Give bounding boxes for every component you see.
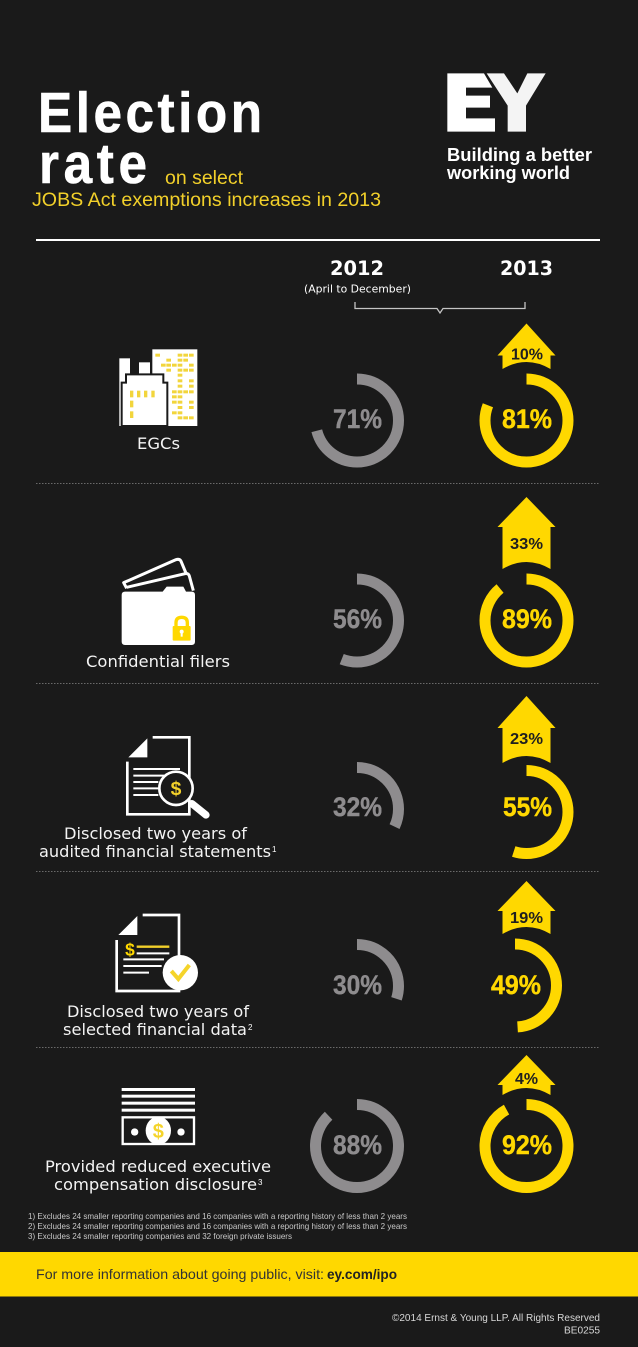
ring: Confidential 2013: 89% — [502, 604, 552, 634]
label: executive compensation disclosure: 3 — [258, 1178, 263, 1187]
label: selected financial data: 2 — [248, 1023, 253, 1032]
ring: selected 2013 — [474, 944, 556, 1027]
footnotes: 1) Excludes 24 smaller reporting companies and 16 companies with a reporting history of less than 2 years — [28, 1211, 407, 1221]
call to action band: For more information about going public, visit: — [36, 1266, 324, 1282]
label: Confidential filers: Confidential filers — [86, 652, 230, 671]
ring: Confidential 2012 — [316, 579, 398, 662]
ring: EGCs 2012 — [316, 379, 398, 462]
EY logo: working world — [446, 163, 570, 183]
arrow: 33%: 33% — [510, 536, 543, 553]
call to action band — [0, 1252, 638, 1296]
icon: banknote — [122, 1088, 195, 1145]
ring: Confidential 2013 — [485, 579, 568, 662]
arrow: 10% — [498, 324, 556, 369]
title: JOBS Act exemptions increases in 2013 — [32, 190, 381, 211]
ring: audited 2013 — [485, 770, 568, 854]
ring: compensation 2012 — [316, 1104, 398, 1188]
label: audited financial statements — [39, 824, 277, 861]
ring: EGCs 2013: 81% — [502, 404, 552, 434]
arrow: 10%: 10% — [511, 346, 543, 364]
ring: Confidential 2012: 56% — [333, 604, 382, 634]
copyright: BE0255 — [564, 1324, 600, 1336]
icon: buildings — [119, 349, 197, 426]
EY logo: Building a better — [447, 145, 592, 165]
ring: audited 2013: 55% — [503, 792, 552, 822]
column headers — [304, 257, 553, 313]
label: executive compensation disclosure: compensation disclosure — [54, 1175, 257, 1194]
label: selected financial data — [63, 1002, 253, 1039]
ring: compensation 2013 — [485, 1104, 568, 1188]
icon: document with magnifier — [127, 737, 206, 815]
title: rate — [39, 133, 147, 196]
icon: banknote: $ — [153, 1121, 164, 1143]
label: audited financial statements: Disclosed two years of — [64, 824, 247, 843]
copyright — [392, 1312, 600, 1336]
column headers: 2012 — [330, 257, 384, 280]
label: selected financial data: Disclosed two years of — [67, 1002, 249, 1021]
title — [32, 82, 381, 211]
ring: selected 2012 — [316, 944, 398, 1028]
footnotes: 3) Excludes 24 smaller reporting companies and 32 foreign private issuers — [28, 1231, 292, 1241]
ring: selected 2013: 49% — [491, 970, 541, 1000]
ring: audited 2012: 32% — [333, 792, 382, 822]
copyright: ©2014 Ernst & Young LLP. All Rights Reserved — [392, 1312, 600, 1324]
arrow: 4%: 4% — [515, 1071, 538, 1088]
ring: EGCs 2013 — [485, 379, 568, 462]
footnotes — [28, 1211, 407, 1241]
ring: compensation 2012: 88% — [333, 1130, 382, 1160]
title: on select — [165, 168, 244, 189]
column headers: (April to December) — [304, 284, 411, 296]
ring: audited 2012 — [316, 768, 398, 850]
ring: EGCs 2012: 71% — [333, 404, 382, 434]
arrow: 23%: 23% — [510, 731, 543, 748]
title: Election — [38, 82, 262, 145]
icon: document with magnifier: $ — [171, 779, 182, 800]
footnotes: 2) Excludes 24 smaller reporting companies and 16 companies with a reporting history of less than 2 years — [28, 1221, 407, 1231]
label: EGCs: EGCs — [137, 434, 180, 453]
ring: compensation 2013: 92% — [502, 1130, 552, 1160]
label: executive compensation disclosure — [45, 1157, 271, 1194]
label: audited financial statements: 1 — [272, 845, 277, 854]
label: audited financial statements: audited financial statements — [39, 842, 271, 861]
column headers: 2013 — [500, 257, 553, 280]
call to action band: ey.com/ipo — [327, 1266, 397, 1282]
arrow: 33% — [498, 497, 556, 569]
arrow: 19%: 19% — [510, 910, 543, 927]
icon: document with check — [117, 915, 198, 991]
icon: locked folder — [122, 559, 195, 645]
EY logo — [446, 73, 592, 183]
label: selected financial data: selected financial data — [63, 1020, 247, 1039]
label: executive compensation disclosure: Provided reduced executive — [45, 1157, 271, 1176]
icon: document with check: $ — [125, 939, 135, 959]
ring: selected 2012: 30% — [333, 970, 382, 1000]
row dividers — [36, 484, 600, 1048]
arrow: 23% — [498, 696, 556, 763]
arrow: 4% — [498, 1055, 556, 1095]
arrow: 19% — [498, 881, 556, 934]
